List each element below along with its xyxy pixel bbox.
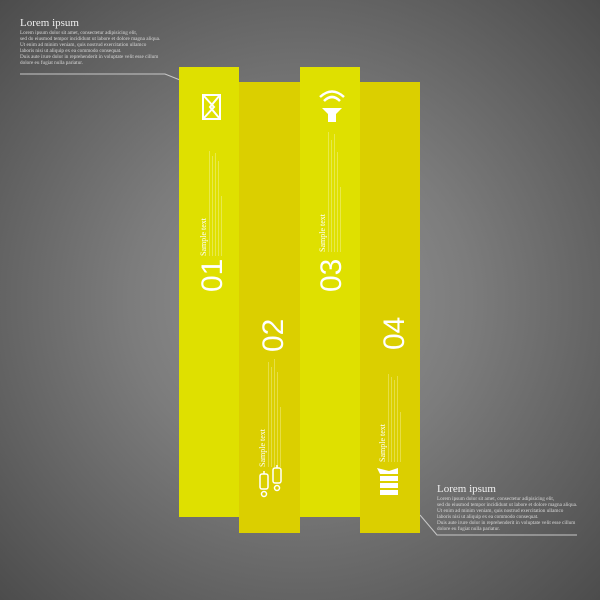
number 04: 04 — [378, 317, 411, 350]
callout line: top-left — [20, 74, 180, 80]
text block: bottom-right: Ut enim ad minim veniam, quis nostrud exercitation ullamco — [437, 508, 563, 514]
bar 4 — [360, 82, 420, 533]
number 03: 03 — [315, 259, 348, 292]
icon: envelope — [203, 95, 220, 119]
number 01: 01 — [196, 259, 229, 292]
text block: top-left: laboris nisi ut aliquip ex ea commodo consequat. — [20, 48, 121, 54]
text block: top-left: sed do eiusmod tempor incididunt ut labore et dolore magna aliqua. — [20, 36, 160, 42]
text block: bottom-right: laboris nisi ut aliquip ex ea commodo consequat. — [437, 514, 538, 520]
sample text 02 — [258, 359, 281, 467]
text block: top-left — [20, 17, 160, 66]
text block: top-left: dolore eu fugiat nulla pariatur. — [20, 60, 83, 66]
bar 2 — [239, 82, 300, 533]
icon: speaker/signal — [320, 92, 344, 122]
text block: bottom-right — [437, 483, 577, 532]
sample text 04 — [378, 374, 401, 462]
icon: bar chart — [377, 468, 398, 495]
sample text 03 — [318, 132, 341, 252]
sample text 04: Sample text — [378, 423, 387, 462]
text block: top-left: Lorem ipsum dolor sit amet, consectetur adipisicing elit, — [20, 30, 137, 36]
text block: bottom-right: Duis aute irure dolor in reprehenderit in voluptate velit esse cillum — [437, 520, 575, 526]
bar 1 — [179, 67, 239, 517]
sample text 03: Sample text — [318, 213, 327, 252]
text block: bottom-right: Lorem ipsum — [437, 483, 496, 495]
bar 3 — [300, 67, 360, 517]
sample text 01 — [199, 151, 222, 256]
text block: top-left: Ut enim ad minim veniam, quis nostrud exercitation ullamco — [20, 42, 146, 48]
text block: bottom-right: sed do eiusmod tempor incididunt ut labore et dolore magna aliqua. — [437, 502, 577, 508]
text block: bottom-right: Lorem ipsum dolor sit amet, consectetur adipisicing elit, — [437, 496, 554, 502]
text block: top-left: Lorem ipsum — [20, 17, 79, 29]
sample text 02: Sample text — [258, 428, 267, 467]
sample text 01: Sample text — [199, 217, 208, 256]
number 02: 02 — [257, 319, 290, 352]
icon: people — [260, 465, 281, 496]
text block: bottom-right: dolore eu fugiat nulla pariatur. — [437, 526, 500, 532]
text block: top-left: Duis aute irure dolor in reprehenderit in voluptate velit esse cillum — [20, 54, 158, 60]
callout line: bottom-right — [420, 515, 577, 535]
